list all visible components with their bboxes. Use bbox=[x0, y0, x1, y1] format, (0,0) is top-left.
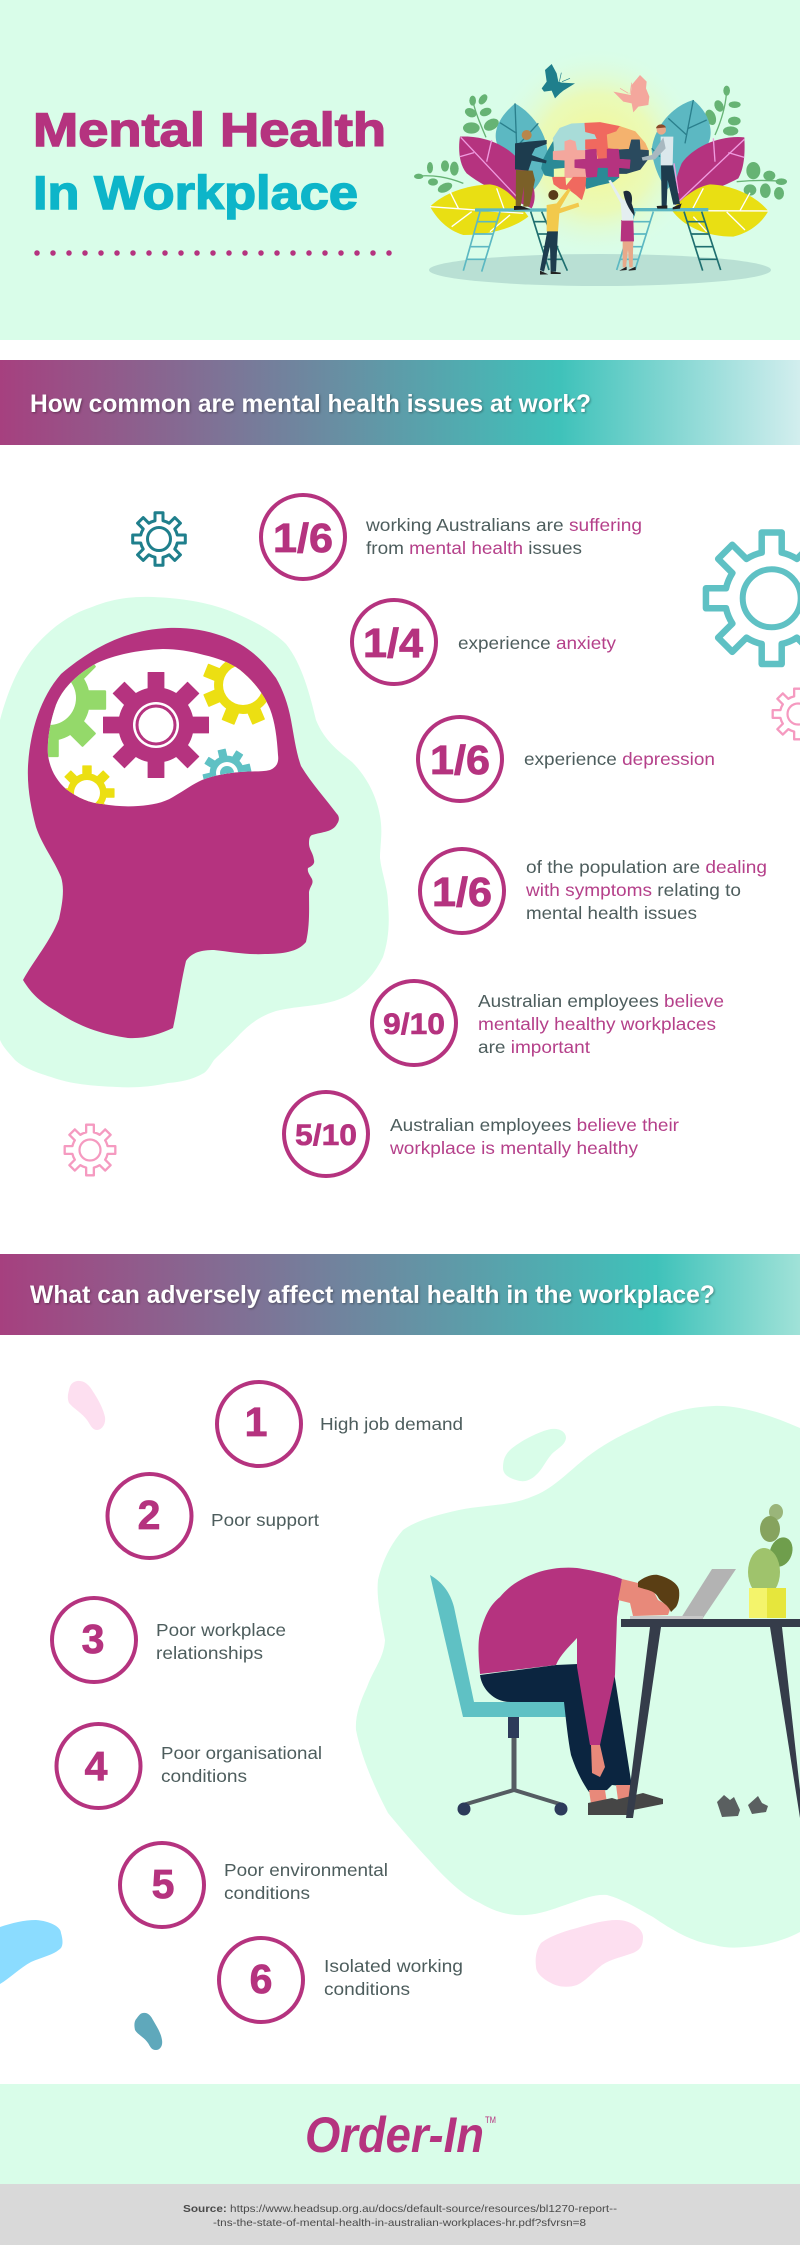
footer: source bbox=[0, 2184, 800, 2245]
potted plant bbox=[748, 1504, 796, 1618]
stat: 1/6 depression: 1/6 bbox=[430, 737, 490, 783]
stat: 5/10 healthy bbox=[284, 1092, 679, 1176]
stat: 1/6 symptoms: of the population are dealing bbox=[526, 857, 767, 877]
stat: 5/10 healthy: Australian employees believe their bbox=[390, 1115, 679, 1135]
stat: 1/4 anxiety: 1/4 bbox=[363, 620, 423, 666]
gears inside head bbox=[48, 662, 267, 804]
header panel bbox=[0, 0, 800, 340]
stat: 1/6 suffering: 1/6 bbox=[273, 515, 333, 561]
icon: teal gear bbox=[202, 748, 252, 780]
section banner: how common bbox=[0, 360, 800, 445]
laptop bbox=[630, 1569, 736, 1619]
factor 3 bbox=[52, 1598, 286, 1682]
person: right man on platform bbox=[642, 124, 682, 209]
icon: pink outline gear right bbox=[773, 689, 800, 739]
title bbox=[33, 103, 386, 219]
title: In Workplace bbox=[33, 166, 358, 219]
hand bbox=[591, 1745, 605, 1777]
desk bbox=[621, 1619, 800, 1818]
footer: logo band bbox=[0, 2084, 800, 2184]
feet bbox=[589, 1785, 634, 1804]
footer: source: -tns-the-state-of-mental-health-in-australian-workplaces-hr.pdf?sfvrsn=8 bbox=[213, 2217, 586, 2229]
legs bbox=[480, 1664, 632, 1792]
factor 6 bbox=[219, 1938, 463, 2022]
factor 6: 6 bbox=[250, 1956, 272, 2002]
stat: 1/4 anxiety: experience anxiety bbox=[458, 633, 616, 653]
footer: logo band: TM bbox=[485, 2115, 496, 2125]
factor 4 bbox=[56, 1724, 322, 1808]
stat: 1/6 depression: experience depression bbox=[524, 749, 715, 769]
section banner: adverse factors bbox=[0, 1254, 800, 1335]
person: left man on platform bbox=[514, 130, 547, 210]
icon: pink outline gear left bbox=[65, 1125, 115, 1175]
stat: 9/10 important: 9/10 bbox=[383, 1008, 445, 1041]
icon: yellow gear bbox=[203, 662, 267, 725]
factor 6: conditions bbox=[324, 1979, 410, 1999]
dotted divider bbox=[37, 250, 391, 256]
stat: 9/10 important: are important bbox=[478, 1037, 590, 1057]
panel: head with gears bbox=[0, 597, 389, 1087]
factor 4: 4 bbox=[85, 1743, 108, 1789]
factor 5: Poor environmental bbox=[224, 1860, 388, 1880]
stat: 9/10 important bbox=[372, 981, 724, 1065]
factor 3: Poor workplace bbox=[156, 1620, 286, 1640]
factor 1 bbox=[217, 1382, 463, 1466]
platforms and ladders bbox=[463, 208, 721, 272]
factor 2: Poor support bbox=[211, 1510, 319, 1530]
torso and arm bbox=[478, 1568, 622, 1745]
icon: small yellow gear bbox=[64, 765, 115, 804]
factor 5: 5 bbox=[152, 1861, 174, 1907]
stat: 1/6 suffering: from mental health issues bbox=[366, 538, 582, 558]
stat: 1/6 symptoms: with symptoms relating to bbox=[525, 880, 741, 900]
factor 2: 2 bbox=[138, 1492, 160, 1538]
plants and leaves bbox=[414, 86, 787, 237]
stat: 9/10 important: mentally healthy workplaces bbox=[478, 1014, 716, 1034]
icon: green gear bbox=[48, 664, 106, 758]
factor 1: 1 bbox=[245, 1399, 267, 1445]
factor 5 bbox=[120, 1843, 388, 1927]
section banner: adverse factors: What can adversely affect mental health in the workplace? bbox=[30, 1281, 715, 1309]
stat: 1/4 anxiety bbox=[352, 600, 616, 684]
stat: 1/6 suffering bbox=[261, 495, 642, 579]
factor 3: 3 bbox=[82, 1616, 104, 1662]
stat: 1/6 symptoms: 1/6 bbox=[432, 869, 492, 915]
head bbox=[618, 1575, 679, 1616]
icon: large light teal outline gear bbox=[706, 533, 800, 664]
stat: 1/6 depression bbox=[418, 717, 715, 801]
icon: teal outline gear bbox=[133, 513, 185, 565]
person: man in yellow bbox=[540, 188, 579, 275]
stat: 1/6 symptoms: mental health issues bbox=[526, 903, 697, 923]
icon: central magenta gear bbox=[103, 672, 209, 778]
illustration: team assembling brain puzzle bbox=[414, 47, 787, 286]
title: Mental Health bbox=[33, 103, 386, 156]
butterflies bbox=[542, 64, 649, 112]
brain cavity bbox=[48, 649, 278, 806]
decorative blobs bbox=[0, 1381, 800, 2050]
chair bbox=[430, 1575, 568, 1816]
crumpled paper bbox=[717, 1795, 768, 1817]
factor 5: conditions bbox=[224, 1883, 310, 1903]
stat: 5/10 healthy: 5/10 bbox=[295, 1119, 357, 1152]
shoes bbox=[588, 1793, 663, 1815]
mint blob behind head bbox=[0, 597, 389, 1087]
person: woman bbox=[608, 180, 636, 271]
stat: 1/6 suffering: working Australians are suffering bbox=[365, 515, 642, 535]
brain puzzle bbox=[542, 123, 648, 199]
stat: 1/6 symptoms bbox=[420, 849, 767, 933]
section banner: how common: How common are mental health issues at work? bbox=[30, 390, 591, 418]
factor 1: High job demand bbox=[320, 1414, 463, 1434]
stat: 9/10 important: Australian employees believe bbox=[478, 991, 724, 1011]
factor 6: Isolated working bbox=[324, 1956, 463, 1976]
factor 4: Poor organisational bbox=[161, 1743, 322, 1763]
stat: 5/10 healthy: workplace is mentally healthy bbox=[389, 1138, 638, 1158]
factor 3: relationships bbox=[156, 1643, 263, 1663]
factor 2 bbox=[108, 1474, 319, 1558]
illustration: exhausted worker at desk bbox=[430, 1504, 800, 1818]
factor 4: conditions bbox=[161, 1766, 247, 1786]
people bbox=[514, 124, 682, 275]
footer: source: Source: https://www.headsup.org.au/docs/default-source/resources/bl1270-report-- bbox=[183, 2203, 618, 2215]
footer: logo band: Order-In bbox=[305, 2107, 484, 2163]
head silhouette bbox=[23, 628, 339, 1038]
